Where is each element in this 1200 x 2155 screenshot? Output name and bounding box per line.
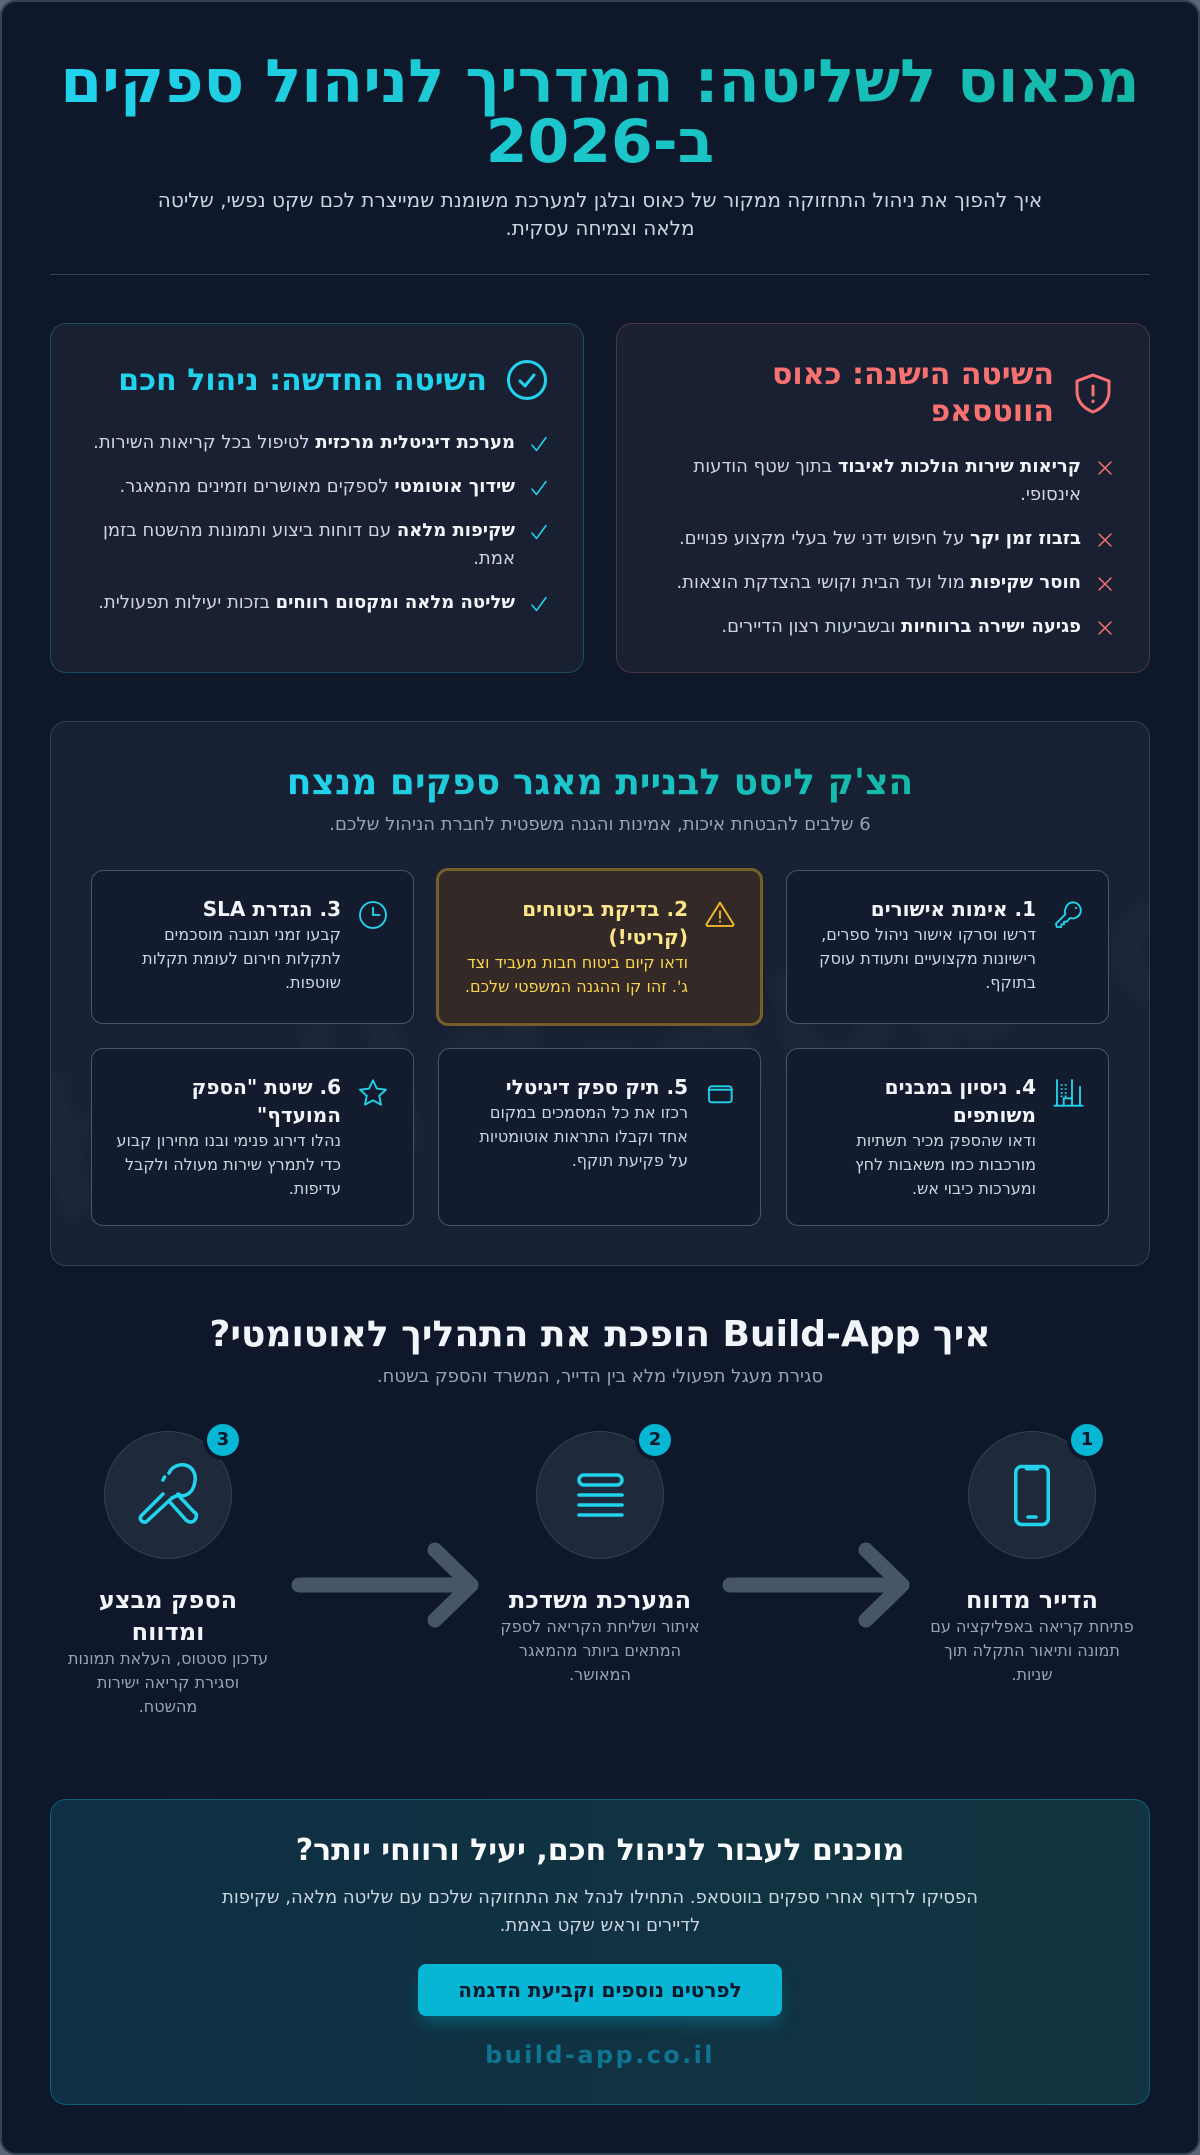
card 2: insurance check (critical): [436, 868, 763, 1026]
heading: checklist: הצ'ק ליסט לבניית מאגר ספקים מנצח: [287, 762, 913, 803]
panel: call to action: [50, 1799, 1150, 2105]
heading block: how Build-App automates: [209, 1314, 991, 1387]
icon: window: [708, 1085, 733, 1104]
step 1: tenant reports: [930, 1424, 1134, 1684]
page frame: הספק מבצע ומדווח: [99, 1586, 237, 1646]
page frame: פתיחת קריאה באפליקציה עם תמונה ותיאור התקלה תוך שניות.: [930, 1617, 1134, 1684]
list: old method problems: בזבוז זמן יקר על חיפוש ידני של בעלי מקצוע פנויים.: [679, 528, 1081, 549]
page frame: המערכת משדכת: [509, 1586, 691, 1614]
list: old method problems: [676, 456, 1112, 637]
badge 1: 1: [1081, 1429, 1093, 1450]
icon: clock: [359, 901, 387, 929]
arrow 2 to 3: [292, 1542, 478, 1628]
page frame: הדייר מדווח: [966, 1586, 1098, 1614]
card 3: SLA: 3. הגדרת SLA: [203, 897, 341, 921]
CTA text: הפסיקו לרדוף אחרי ספקים בווטסאפ. התחילו לנהל את התחזוקה שלכם עם שליטה מלאה, שקיפות לדיירים וראש שקט באמת.: [222, 1887, 978, 1936]
card 3: SLA: [91, 870, 414, 1024]
page frame: איתור ושליחת הקריאה לספק המתאים ביותר מהמאגר המאושר.: [500, 1617, 700, 1684]
list: new method benefits: [93, 432, 547, 613]
card 4: shared buildings experience: [786, 1048, 1109, 1226]
card 6: preferred supplier: 6. שיטת "הספק המועדף": [192, 1075, 341, 1127]
heading: old method: השיטה הישנה: כאוס הווטסאפ: [772, 357, 1054, 429]
icon: building: [1053, 1079, 1084, 1107]
icon: wrench: [104, 1431, 232, 1559]
icon: star: [359, 1079, 387, 1106]
badge 2: 2: [649, 1429, 661, 1450]
list: old method problems: חוסר שקיפות מול ועד הבית וקושי בהצדקת הוצאות.: [676, 572, 1081, 593]
CTA heading: מוכנים לעבור לניהול חכם, יעיל ורווחי יותר?: [296, 1833, 904, 1868]
icon: key: [1055, 901, 1082, 928]
step 3: supplier executes: [68, 1424, 268, 1716]
CTA button: לפרטים נוספים וקביעת הדגמה: [458, 1978, 742, 2002]
icon: list: [536, 1431, 664, 1559]
icon: phone: [968, 1431, 1096, 1559]
card 4: shared buildings experience: ודאו שהספק מכיר תשתיות מורכבות כמו משאבות לחץ ומערכות כיבוי אש.: [855, 1131, 1036, 1198]
CTA button: [418, 1964, 782, 2016]
list: new method benefits: מערכת דיגיטלית מרכזית לטיפול בכל קריאות השירות.: [93, 432, 515, 453]
heading block: how Build-App automates: סגירת מעגל תפעולי מלא בין הדייר, המשרד והספק בשטח.: [377, 1366, 823, 1387]
icon: warning triangle: [706, 902, 734, 927]
list: old method problems: קריאות שירות הולכות לאיבוד בתוך שטף הודעות אינסופי.: [693, 456, 1081, 505]
card 5: digital vendor file: רכזו את כל המסמכים במקום אחד וקבלו התראות אוטומטיות על פקיעת תוקף.: [479, 1103, 688, 1170]
card 4: shared buildings experience: 4. ניסיון במבנים משותפים: [885, 1075, 1036, 1127]
list: new method benefits: שליטה מלאה ומקסום רווחים בזכות יעילות תפעולית.: [98, 592, 515, 613]
list: old method problems: פגיעה ישירה ברווחיות ובשביעות רצון הדיירים.: [721, 616, 1081, 637]
card 1: verify licences: [786, 870, 1109, 1024]
panel: old method: [616, 323, 1150, 673]
checklist subtitle: 6 שלבים להבטחת איכות, אמינות והגנה משפטית לחברת הניהול שלכם.: [329, 814, 871, 835]
card 5: digital vendor file: [438, 1048, 761, 1226]
heading: new method: השיטה החדשה: ניהול חכם: [118, 362, 487, 398]
title: מכאוס לשליטה: המדריך לניהול ספקים ב-2026: [60, 47, 1140, 177]
card 3: SLA: קבעו זמני תגובה מוסכמים לתקלות חירום לעומת תקלות שוטפות.: [142, 925, 341, 992]
page frame: עדכון סטטוס, העלאת תמונות וסגירת קריאה ישירות מהשטח.: [68, 1649, 268, 1716]
list: new method benefits: שקיפות מלאה עם דוחות ביצוע ותמונות מהשטח בזמן אמת.: [103, 520, 515, 569]
arrow 1 to 2: [722, 1542, 910, 1628]
subtitle: איך להפוך את ניהול התחזוקה ממקור של כאוס ובלגן למערכת משומנת שמייצרת לכם שקט נפשי, שליטה מלאה וצמיחה עסקית.: [158, 188, 1042, 240]
card 1: verify licences: 1. אימות אישורים: [871, 897, 1036, 921]
badge 3: 3: [217, 1429, 229, 1450]
panel: new method: [50, 323, 584, 673]
icon: check circle: [507, 360, 547, 400]
badge 1: [1071, 1424, 1103, 1456]
card 2: insurance check (critical): 2. בדיקת ביטוחים (קריטי!): [522, 897, 688, 949]
badge 3: [207, 1424, 239, 1456]
card 5: digital vendor file: 5. תיק ספק דיגיטלי: [506, 1075, 688, 1099]
card 2: insurance check (critical): ודאו קיום ביטוח חבות מעביד וצד ג'. זהו קו ההגנה המשפטי שלכם.: [465, 953, 688, 996]
badge 2: [639, 1424, 671, 1456]
list: new method benefits: שידוך אוטומטי לספקים מאושרים וזמינים מהמאגר.: [119, 476, 515, 497]
card 6: preferred supplier: נהלו דירוג פנימי ובנו מחירון קבוע כדי לתמרץ שירות מעולה ולקבל עדיפות.: [117, 1131, 341, 1198]
website address: build-app.co.il: [485, 2041, 715, 2069]
step 2: system dispatches: [500, 1424, 700, 1684]
card 6: preferred supplier: [91, 1048, 414, 1226]
icon: shield alert: [1076, 374, 1110, 414]
heading block: how Build-App automates: איך Build-App הופכת את התהליך לאוטומטי?: [209, 1314, 991, 1355]
card 1: verify licences: דרשו וסרקו אישור ניהול ספרים, רישיונות מקצועיים ותעודת עוסק בתוקף.: [819, 925, 1036, 992]
